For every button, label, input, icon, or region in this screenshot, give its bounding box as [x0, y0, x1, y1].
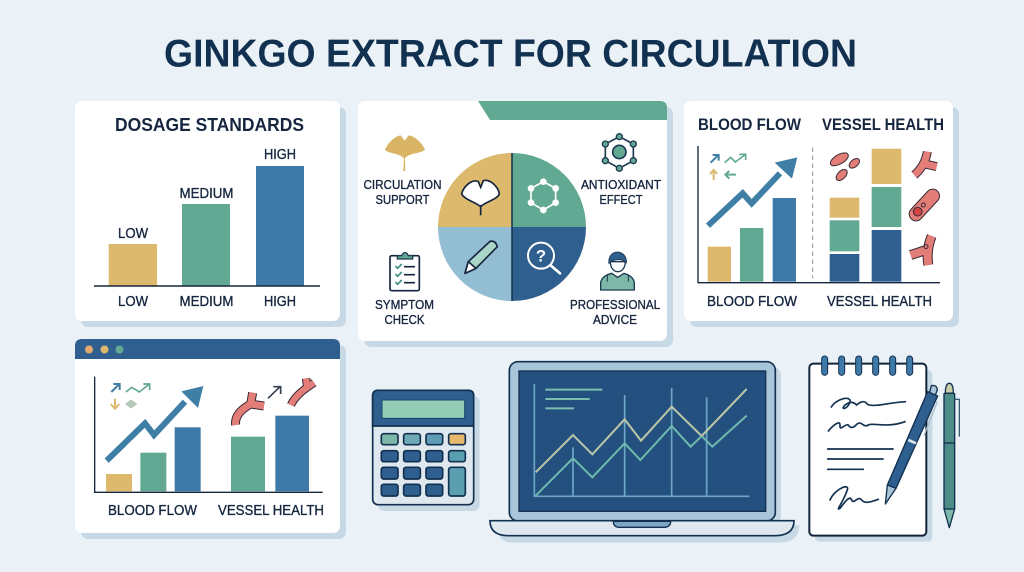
pen: teal: [944, 383, 959, 528]
window header bar: [75, 339, 340, 359]
heading: vessel health: VESSEL HEALTH: [822, 115, 944, 134]
axis label: vessel health: VESSEL HEALTH: [218, 503, 324, 519]
item: circulation support: CIRCULATION: [364, 177, 442, 192]
axis label: blood flow: BLOOD FLOW: [707, 294, 797, 310]
window dots: [85, 346, 124, 354]
icons inside wheel: ?: [536, 247, 546, 266]
item: professional advice: PROFESSIONAL: [570, 297, 660, 312]
item: antioxidant effect: ANTIOXIDANT: [581, 177, 661, 192]
charts: growth and stacked bars: [698, 146, 940, 283]
item: professional advice: [570, 252, 660, 327]
bar chart: dosage levels: MEDIUM: [180, 186, 234, 202]
panel: browser window chart: [75, 339, 346, 539]
item: circulation support: [364, 135, 442, 207]
panel: dosage standards: [75, 101, 346, 327]
item: professional advice: ADVICE: [593, 312, 637, 327]
axis label: blood flow: BLOOD FLOW: [108, 503, 197, 519]
pen: navy: [885, 385, 938, 504]
icon: calculator: [373, 390, 480, 511]
bar chart: dosage levels: HIGH: [264, 147, 296, 163]
handwriting: [828, 398, 905, 509]
green header tab: [478, 101, 667, 120]
panel: blood flow and vessel health: [684, 101, 959, 327]
bar chart and trend arrow: [95, 377, 323, 492]
title: GINKGO EXTRACT FOR CIRCULATION: [164, 32, 857, 76]
heading: blood flow: BLOOD FLOW: [698, 115, 802, 134]
axis label: vessel health: VESSEL HEALTH: [827, 294, 932, 310]
icon: molecule: [602, 134, 636, 171]
bar chart: dosage levels: [94, 147, 320, 310]
icon: ginkgo leaf: [385, 135, 425, 171]
spiral rings: [822, 356, 913, 375]
item: antioxidant effect: EFFECT: [600, 192, 643, 207]
icon: notepad and pens: [809, 356, 959, 542]
pie wheel: [438, 153, 586, 301]
item: symptom check: SYMPTOM: [375, 297, 434, 312]
icons inside wheel: [462, 178, 560, 273]
bar chart: dosage levels: HIGH: [264, 294, 296, 310]
panel: benefits wheel: [358, 101, 673, 347]
heading: dosage standards: DOSAGE STANDARDS: [115, 115, 304, 135]
bar chart: dosage levels: MEDIUM: [180, 294, 234, 310]
bar chart: dosage levels: LOW: [118, 226, 148, 242]
item: symptom check: CHECK: [384, 312, 425, 327]
icon: laptop with line chart: [490, 362, 799, 543]
bar chart: dosage levels: LOW: [118, 294, 148, 310]
notepad page: [809, 364, 926, 536]
item: antioxidant effect: [581, 134, 661, 207]
item: circulation support: SUPPORT: [376, 192, 430, 207]
icon: clipboard: [390, 252, 419, 291]
item: symptom check: [375, 252, 434, 327]
icon: doctor: [601, 252, 634, 290]
